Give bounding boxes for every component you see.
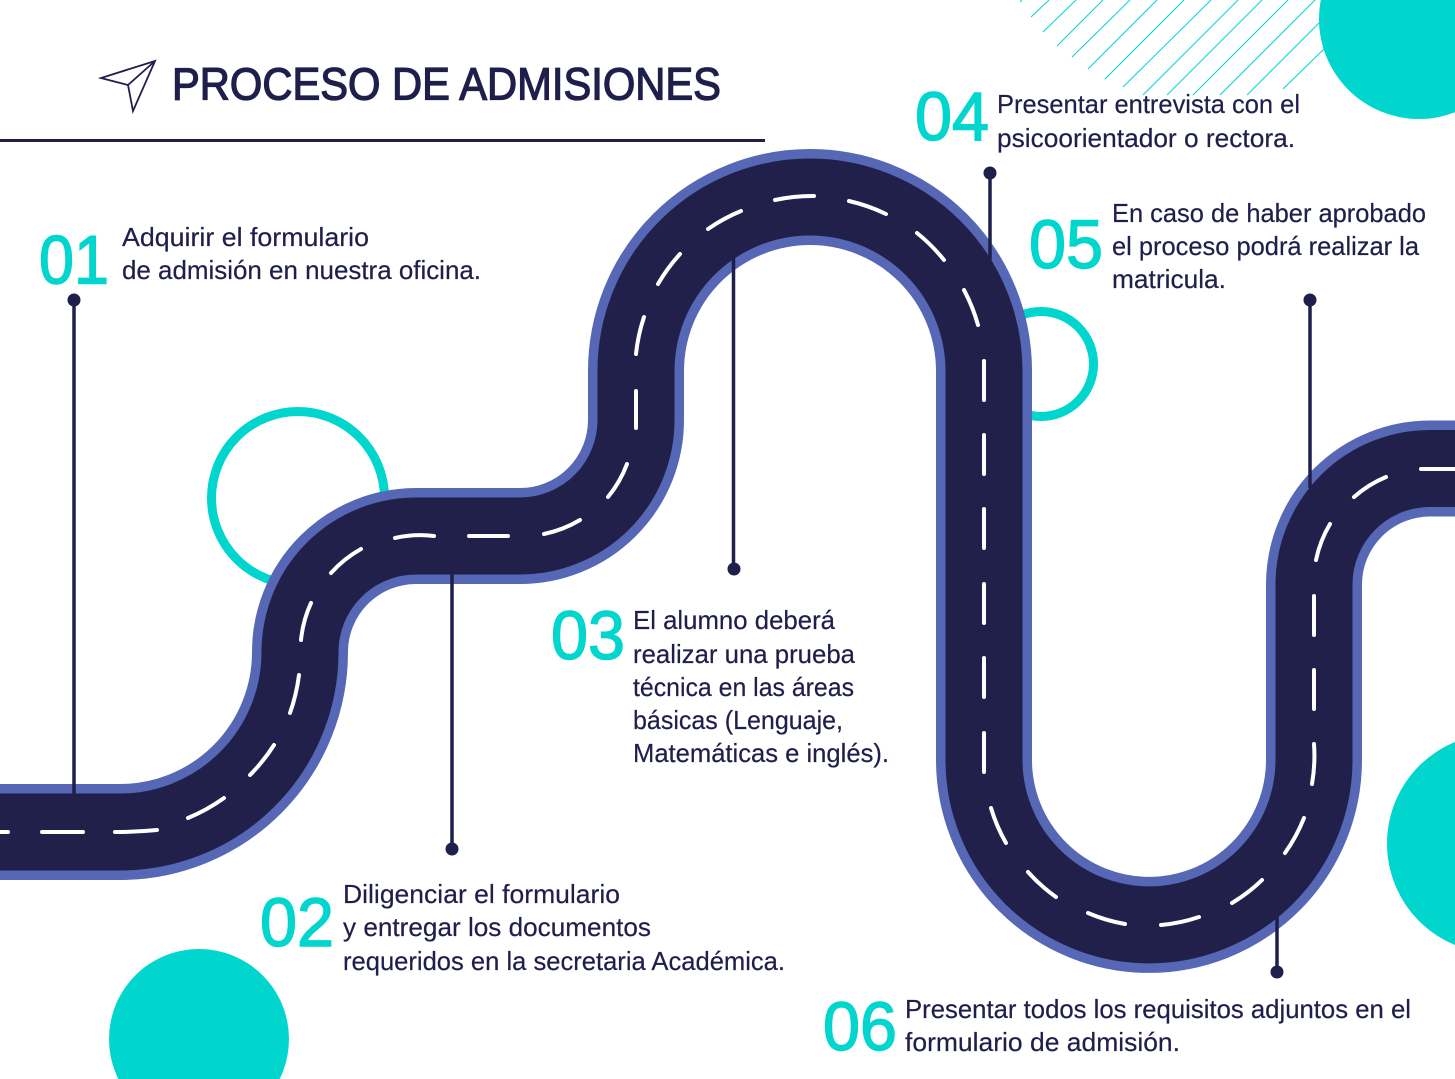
number 01: 01: [39, 222, 109, 298]
text 03: El alumno deberá: [633, 605, 836, 635]
step 06: [823, 915, 1411, 1065]
text 02: [343, 879, 785, 976]
text 03: básicas (Lenguaje,: [633, 705, 843, 735]
connector 01: [68, 294, 80, 794]
text 06: Presentar todos los requisitos adjuntos en el: [905, 994, 1411, 1024]
text 03: Matemáticas e inglés).: [633, 738, 889, 768]
text 03: técnica en las áreas: [633, 672, 854, 702]
number 05: 05: [1029, 206, 1103, 283]
step 02: [260, 574, 785, 976]
text 04: Presentar entrevista con el: [997, 89, 1300, 119]
number 03: 03: [551, 597, 625, 674]
step 04: [915, 78, 1300, 260]
step 05: [1029, 198, 1426, 488]
connector 02: [446, 574, 458, 856]
step 01: [39, 222, 481, 794]
connector 03: [728, 256, 740, 576]
connector 05: [1304, 294, 1316, 488]
text 06: [905, 994, 1411, 1057]
heading: PROCESO DE ADMISIONES: [172, 59, 721, 110]
text 05: En caso de haber aprobado: [1112, 198, 1426, 228]
text 04: [997, 89, 1300, 153]
winding road: [0, 196, 1455, 925]
text 02: Diligenciar el formulario: [343, 879, 620, 909]
text 05: matricula.: [1112, 264, 1226, 294]
decorative circle: right: [1387, 734, 1455, 953]
text 01: de admisión en nuestra oficina.: [122, 255, 481, 285]
connector 04: [984, 166, 996, 260]
text 04: psicoorientador o rectora.: [997, 123, 1295, 153]
step 03: [551, 256, 889, 768]
road centre dashes: [0, 196, 1455, 925]
title rule: [0, 139, 765, 142]
decorative circle: bottom left: [109, 949, 289, 1079]
number 02: 02: [260, 884, 334, 961]
text 01: [122, 222, 481, 285]
text 05: [1112, 198, 1426, 294]
text 01: Adquirir el formulario: [122, 222, 369, 252]
title: [101, 59, 721, 111]
text 06: formulario de admisión.: [905, 1027, 1180, 1057]
connector 06: [1270, 915, 1284, 978]
decorative ring: right: [988, 312, 1094, 416]
number 04: 04: [915, 78, 989, 155]
text 02: requeridos en la secretaria Académica.: [343, 946, 785, 976]
text 02: y entregar los documentos: [343, 912, 651, 942]
text 05: el proceso podrá realizar la: [1112, 231, 1420, 261]
icon: paper plane: [101, 61, 155, 111]
text 03: realizar una prueba: [633, 639, 856, 669]
decorative circle: top right: [1319, 0, 1455, 119]
decorative ring: left: [212, 412, 384, 584]
text 03: [633, 605, 889, 768]
number 06: 06: [823, 988, 897, 1065]
hatch pattern: [1020, 0, 1342, 95]
